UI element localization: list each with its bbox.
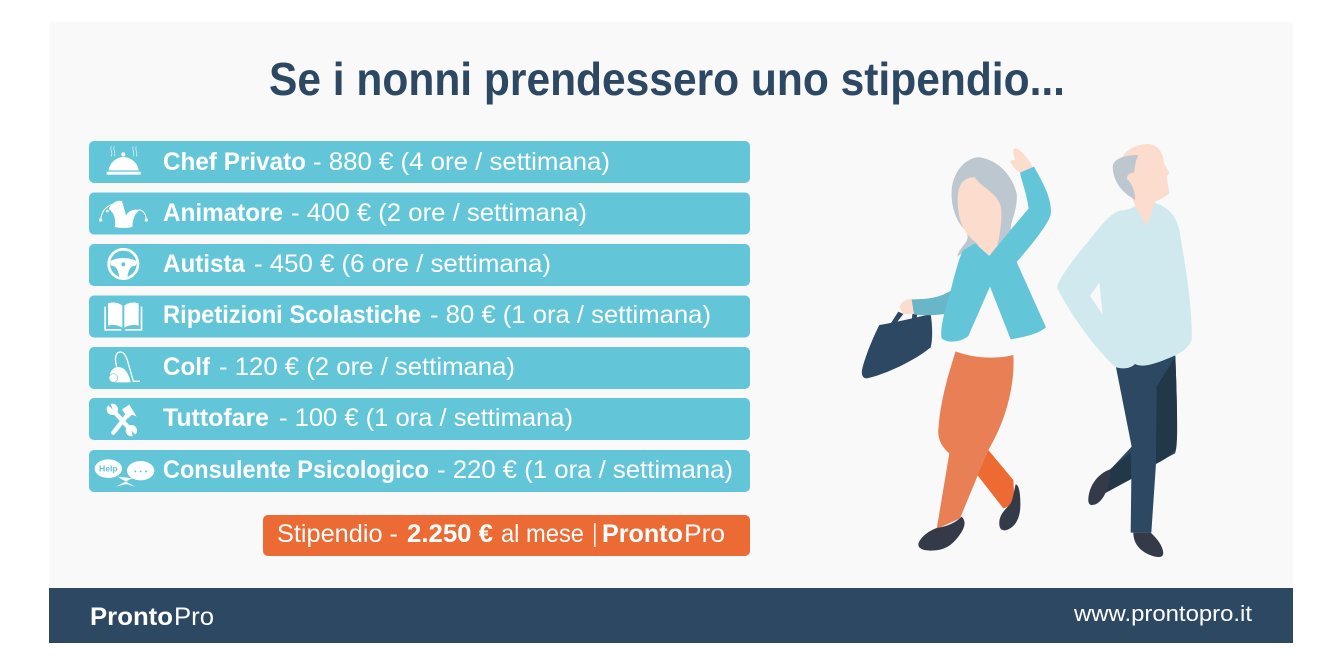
row: tuttofare: - 100 € (1 ora / settimana) xyxy=(279,404,573,432)
row: autista xyxy=(89,244,750,286)
callout: total salary: al mese xyxy=(501,520,584,548)
footer logo: Pronto xyxy=(90,603,173,631)
row: colf xyxy=(89,347,750,389)
footer bar xyxy=(49,588,1293,643)
panel: job list xyxy=(89,141,750,492)
row: ripetizioni scolastiche xyxy=(89,296,750,338)
row: tuttofare: Tuttofare xyxy=(163,404,269,432)
footer logo: Pro xyxy=(174,603,214,631)
icon: hammer and wrench xyxy=(106,402,137,438)
callout: total salary xyxy=(263,515,750,556)
callout: total salary: Pronto xyxy=(602,520,683,548)
row: chef privato: Chef Privato xyxy=(163,148,306,176)
row: ripetizioni scolastiche: - 80 € (1 ora / settimana) xyxy=(430,301,711,329)
row: colf: Colf xyxy=(163,353,211,381)
footer logo xyxy=(90,603,214,631)
row: animatore: - 400 € (2 ore / settimana) xyxy=(291,199,587,227)
row: animatore: Animatore xyxy=(163,199,283,227)
title: Se i nonni prendessero uno stipendio... xyxy=(269,53,1065,105)
row: autista: Autista xyxy=(163,250,246,278)
callout: total salary: Pro xyxy=(684,520,725,548)
figure: grandmother xyxy=(862,148,1051,551)
icon: speech bubbles xyxy=(95,459,154,487)
icon: open book xyxy=(104,303,142,331)
footer website: www.prontopro.it xyxy=(1073,601,1252,626)
illustration: grandparents xyxy=(862,144,1192,557)
row: tuttofare xyxy=(89,398,750,440)
row: ripetizioni scolastiche: Ripetizioni Scolastiche xyxy=(163,301,421,329)
row: chef privato xyxy=(89,141,750,183)
icon: jester hat xyxy=(99,201,148,228)
icon: steering wheel xyxy=(109,249,138,279)
icon: vacuum cleaner xyxy=(109,352,140,382)
icon: speech bubbles: Help xyxy=(99,464,118,474)
row: consulente psicologico xyxy=(89,450,750,492)
row: consulente psicologico: - 220 € (1 ora / settimana) xyxy=(437,456,733,484)
callout: total salary: Stipendio - xyxy=(277,520,398,548)
row: colf: - 120 € (2 ore / settimana) xyxy=(219,353,515,381)
callout: total salary: 2.250 € xyxy=(407,520,493,548)
icon: cloche xyxy=(107,146,141,175)
row: autista: - 450 € (6 ore / settimana) xyxy=(254,250,551,278)
row: animatore xyxy=(89,192,750,234)
row: chef privato: - 880 € (4 ore / settimana) xyxy=(313,148,610,176)
figure: grandfather xyxy=(1057,144,1192,557)
row: consulente psicologico: Consulente Psicologico xyxy=(163,456,429,484)
